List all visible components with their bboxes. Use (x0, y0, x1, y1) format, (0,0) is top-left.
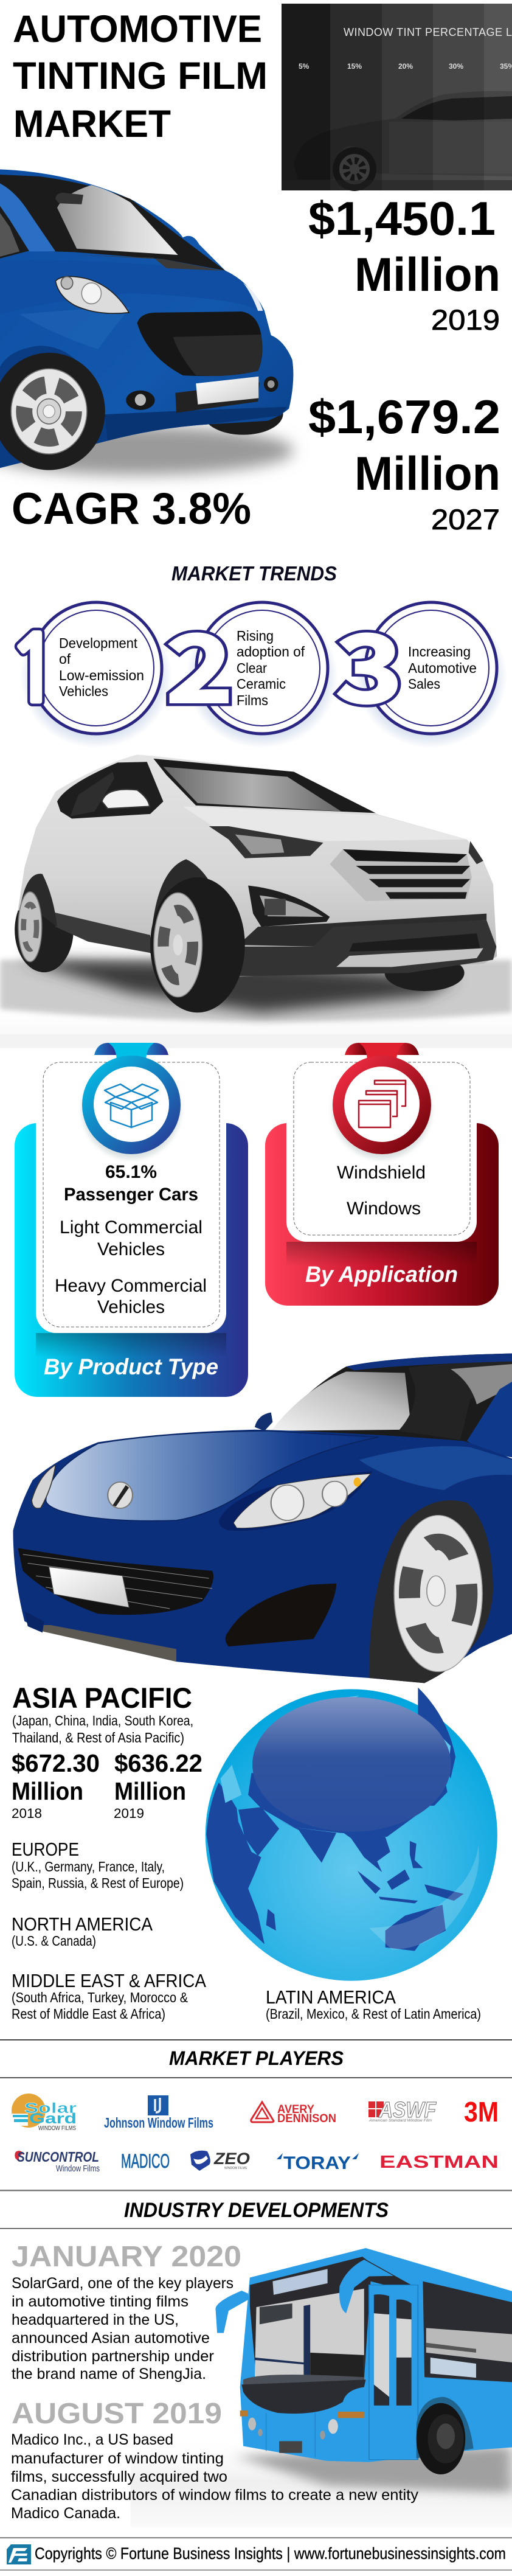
segment list (337, 1163, 426, 1219)
segment list: Vehicles (97, 1297, 165, 1317)
white card (36, 1055, 226, 1333)
illustration: globe (206, 1688, 497, 1981)
development: August 2019: Madico Inc., a US based (11, 2431, 173, 2448)
panel: trend 2: Films (237, 692, 268, 708)
big stat: 2027 value: $1,679.2 (308, 390, 500, 444)
panel: trend 3: 3 (336, 595, 403, 729)
region: Asia Pacific: 2018 (12, 1806, 42, 1821)
light band behind segment panels (0, 1034, 512, 1048)
region: Asia Pacific: Thailand, & Rest of Asia Pacific) (12, 1730, 184, 1746)
segment list: Vehicles (97, 1239, 165, 1259)
region: Asia Pacific: ASIA PACIFIC (12, 1682, 192, 1714)
development: January 2020: JANUARY 2020 (12, 2241, 241, 2273)
icon: open box (105, 1084, 158, 1127)
panel: trend 3: 3 (336, 595, 403, 729)
segment list: Windshield (337, 1163, 426, 1183)
panel: trend 2: 2 (166, 595, 233, 729)
region: Asia Pacific (12, 1682, 202, 1821)
title: TINTING FILM (13, 55, 268, 97)
panel background (265, 1123, 499, 1306)
panel: trend 3: Increasing (408, 644, 471, 660)
region: Europe (12, 1839, 184, 1891)
development: August 2019: AUGUST 2019 (12, 2398, 222, 2430)
icon: stacked windows (359, 1081, 406, 1127)
region: North America: NORTH AMERICA (12, 1913, 153, 1935)
map highlights (220, 1696, 451, 1803)
panel caption: By Application (305, 1262, 458, 1287)
illustration: blue bus (131, 2248, 512, 2527)
panel: by product type (15, 1043, 248, 1397)
region: Latin America: (Brazil, Mexico, & Rest of Latin America) (266, 2006, 481, 2022)
region: Asia Pacific: Million (114, 1777, 186, 1805)
logo: ASWF: American Standard Window Film (368, 2118, 432, 2123)
panel: by application (265, 1043, 499, 1306)
region: Asia Pacific: $672.30 (12, 1749, 100, 1777)
logo: Solar Gard (12, 2094, 77, 2132)
glossy lens (252, 1697, 451, 1832)
panel: trend 1: of (59, 651, 71, 667)
development: August 2019: manufacturer of window tinting (11, 2450, 224, 2467)
ribbon medallion (82, 1043, 181, 1159)
panel: trend 2: Rising (237, 628, 274, 644)
panel background (15, 1123, 248, 1397)
region: Europe: Spain, Russia, & Rest of Europe) (12, 1875, 184, 1891)
panel: trend 1: 1 (7, 624, 61, 716)
segment list: Windows (347, 1199, 421, 1219)
segment list: Heavy Commercial (55, 1276, 207, 1296)
big stat: 2027 value (308, 390, 500, 535)
image: window tint percentage chart (282, 4, 512, 191)
logo: Avery Dennison: AVERY (277, 2103, 314, 2116)
logo: Suncontrol (15, 2149, 100, 2174)
region: Europe: (U.K., Germany, France, Italy, (12, 1859, 165, 1875)
logo: Suncontrol: Window Films (56, 2163, 100, 2174)
logo: Eastman: EASTMAN (379, 2153, 499, 2172)
logo: Solar Gard: Gard (29, 2111, 77, 2127)
segment list: 65.1% (105, 1162, 157, 1182)
panel: trend 1: Low-emission (59, 667, 144, 683)
panel: trend 1: Vehicles (59, 683, 108, 699)
panel: trend 2 (166, 595, 338, 748)
region: Europe: EUROPE (12, 1839, 79, 1860)
white card (286, 1055, 477, 1242)
heading: market trends: MARKET TRENDS (171, 562, 337, 585)
segment list: Light Commercial (60, 1217, 202, 1238)
logo: Johnson Window Films: Johnson Window Films (104, 2115, 213, 2131)
image: window tint percentage chart: 5% (299, 62, 310, 71)
panel: trend 2: Ceramic (237, 676, 286, 692)
big stat: 2019 value (308, 192, 500, 336)
segment list: Passenger Cars (64, 1185, 198, 1205)
region: Middle East and Africa: MIDDLE EAST & AFRICA (12, 1970, 206, 1991)
region: North America: (U.S. & Canada) (12, 1933, 96, 1949)
region: Asia Pacific: (Japan, China, India, South Korea, (12, 1713, 193, 1728)
logo: Solar Gard: WINDOW FILMS (38, 2125, 76, 2132)
illustration: silver SUV (0, 754, 512, 1048)
title: MARKET (13, 103, 171, 145)
image: window tint percentage chart: WINDOW TINT PERCENTAGE L (344, 26, 512, 38)
panel: trend 2: Clear (237, 660, 267, 676)
development: August 2019: Madico Canada. (11, 2505, 120, 2522)
panel: trend 1: 1 (7, 624, 61, 716)
logo: ASWF: ASWF (378, 2097, 437, 2122)
logo: Zeo (190, 2150, 250, 2171)
icon: Fortune Business Insights logo (7, 2544, 31, 2564)
development: January 2020: distribution partnership under (12, 2348, 214, 2365)
logo: Zeo: ZEO (213, 2150, 250, 2168)
panel: trend 3: Automotive (408, 660, 477, 676)
panel: trend 1: Development (59, 635, 138, 651)
title: AUTOMOTIVE (13, 8, 262, 50)
panel: trend 2: adoption of (237, 644, 305, 660)
panel: trend 3 (336, 595, 507, 748)
region: Asia Pacific: Million (12, 1777, 83, 1805)
big stat: 2019 value: Million (355, 248, 500, 301)
development: January 2020: announced Asian automotive (12, 2330, 210, 2347)
illustration: blue compact car (0, 169, 294, 475)
CAGR stat: CAGR 3.8% (12, 484, 251, 534)
development: January 2020: the brand name of ShengJia. (12, 2365, 206, 2383)
region: Latin America (266, 1986, 481, 2022)
map land (206, 1688, 464, 1951)
logo: Johnson Window Films (104, 2095, 213, 2131)
region: Middle East and Africa: (South Africa, Turkey, Morocco & (12, 1989, 188, 2005)
logo: Avery Dennison: DENNISON (277, 2112, 336, 2125)
development: August 2019: Canadian distributors of window films to create a new entity (11, 2487, 419, 2504)
logo: Solar Gard: Solar (24, 2100, 77, 2117)
segment list (55, 1162, 207, 1317)
panel caption: By Product Type (44, 1354, 218, 1379)
big stat: 2019 value: 2019 (431, 304, 500, 336)
region: Asia Pacific: 2019 (114, 1806, 144, 1821)
big stat: 2019 value: $1,450.1 (308, 192, 496, 245)
logo: Suncontrol: SUNCONTROL (17, 2149, 99, 2165)
logo: Zeo: WINDOW FILMS (224, 2167, 247, 2170)
logo: Toray: TORAY (283, 2153, 351, 2173)
panel: trend 2: 2 (166, 595, 233, 729)
image: window tint percentage chart: 20% (398, 62, 413, 71)
image: window tint percentage chart: 15% (347, 62, 362, 71)
logo: 3M: 3M (464, 2096, 499, 2128)
logo: Madico: MADICO (121, 2150, 170, 2172)
big stat: 2027 value: Million (355, 447, 500, 500)
region: North America (12, 1913, 153, 1949)
heading: market players: MARKET PLAYERS (169, 2047, 344, 2069)
development: January 2020: headquartered in the US, (12, 2311, 179, 2328)
development: January 2020 (12, 2241, 241, 2383)
development: August 2019: films, successfully acquired two (11, 2468, 227, 2485)
panel: trend 3: Sales (408, 676, 440, 692)
big stat: 2027 value: 2027 (431, 503, 500, 535)
title (13, 8, 268, 145)
logo: Avery Dennison (251, 2102, 336, 2125)
region: Asia Pacific: $636.22 (114, 1749, 202, 1777)
image: window tint percentage chart: 30% (449, 62, 463, 71)
ribbon medallion (333, 1043, 431, 1159)
region: Latin America: LATIN AMERICA (266, 1986, 396, 2008)
development: August 2019 (11, 2398, 419, 2522)
region: Middle East and Africa: Rest of Middle East & Africa) (12, 2006, 165, 2022)
panel: trend 1 (7, 602, 172, 748)
region: Middle East and Africa (12, 1970, 206, 2022)
heading: industry developments: INDUSTRY DEVELOPMENTS (124, 2199, 389, 2222)
development: January 2020: in automotive tinting films (12, 2293, 189, 2310)
development: January 2020: SolarGard, one of the key players (12, 2275, 234, 2292)
illustration: blue sports car (13, 1354, 512, 1683)
